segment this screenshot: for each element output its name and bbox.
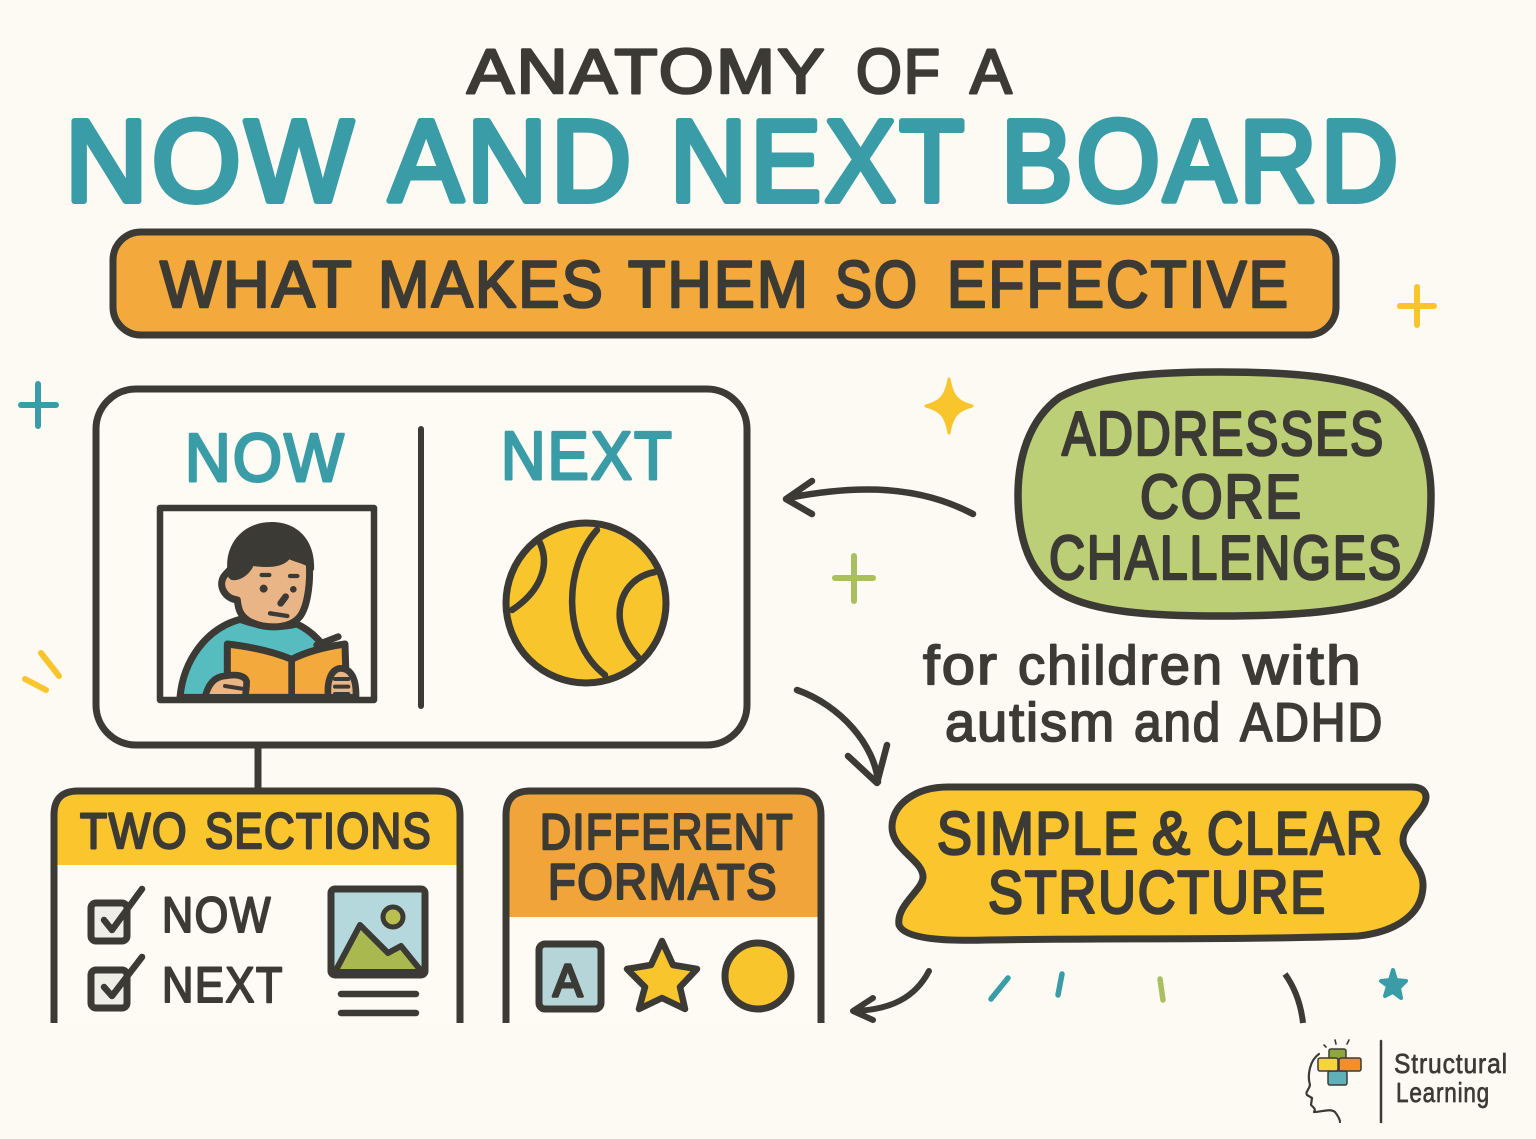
heading: different formats: FORMATS: [548, 854, 778, 910]
sparkle: yellow star: [926, 379, 972, 433]
icon: letter A: [539, 944, 601, 1009]
callout: simple and clear structure: SIMPLE: [937, 800, 1140, 867]
subtitle banner: THEM: [628, 247, 810, 321]
text: for children with autism and ADHD: ADHD: [1240, 691, 1384, 753]
picture frame: [160, 508, 374, 700]
sparkle: small dashes: [991, 978, 1008, 999]
text: for children with autism and ADHD: children: [1018, 634, 1224, 696]
icon: yellow ball: [506, 523, 666, 683]
heading: two sections: TWO: [80, 803, 188, 859]
partial curve: [1285, 974, 1303, 1023]
title: anatomy of a: ANATOMY: [467, 37, 827, 107]
sparkle: teal plus: [21, 384, 56, 426]
heading: different formats: [540, 804, 794, 910]
callout: addresses core challenges: [1018, 372, 1431, 616]
board: now and next: [96, 389, 747, 745]
decorative sparkles: [21, 287, 1434, 1000]
subtitle banner: MAKES: [378, 247, 605, 321]
text: for children with autism and ADHD: for: [923, 634, 999, 696]
title: now and next board: [65, 96, 1402, 226]
sparkle: yellow dashes: [25, 653, 59, 690]
icon: picture: [331, 889, 425, 975]
title: now and next board: NEXT: [670, 96, 968, 226]
arrow: to different formats: [853, 971, 929, 1020]
icon: letter A: A: [553, 955, 584, 1006]
logo wordmark: Structural: [1394, 1048, 1508, 1079]
title: anatomy of a: [467, 37, 1014, 107]
arrow: to simple structure: [797, 690, 887, 783]
logo wordmark: Learning: [1396, 1077, 1490, 1108]
checkbox: now: [91, 889, 142, 941]
text: for children with autism and ADHD: [923, 634, 1384, 753]
text lines: [341, 994, 416, 1013]
subtitle banner: WHAT: [160, 247, 354, 321]
subtitle banner: SO: [835, 247, 919, 321]
callout: simple and clear structure: &: [1152, 800, 1192, 867]
heading: now: NOW: [185, 420, 346, 496]
sparkle: green plus: [835, 556, 873, 601]
text: for children with autism and ADHD: and: [1134, 691, 1222, 753]
subtitle banner: [113, 232, 1336, 335]
title: anatomy of a: OF: [856, 37, 942, 107]
heading: two sections: SECTIONS: [205, 803, 432, 859]
checkbox: next: [91, 957, 142, 1008]
logo icon: head with blocks: [1306, 1040, 1361, 1122]
panel: two sections: [54, 791, 460, 1023]
icon: circle: [725, 943, 791, 1009]
icon: star: [627, 941, 697, 1009]
connector: [254, 745, 262, 788]
subtitle banner: EFFECTIVE: [947, 247, 1290, 321]
label: now: NOW: [162, 887, 272, 943]
callout: addresses core challenges: CHALLENGES: [1049, 524, 1403, 593]
title: now and next board: BOARD: [1001, 96, 1402, 226]
sparkle: yellow plus: [1400, 287, 1434, 325]
callout: simple and clear structure: STRUCTURE: [988, 859, 1327, 926]
logo: structural learning: [1306, 1040, 1508, 1122]
heading: next: NEXT: [501, 418, 674, 494]
icon: child reading a book: [180, 522, 356, 697]
heading: two sections: [80, 803, 432, 859]
callout: addresses core challenges: ADDRESSES: [1062, 400, 1385, 469]
heading: different formats: DIFFERENT: [540, 804, 794, 860]
callout: addresses core challenges: CORE: [1140, 463, 1303, 532]
label: next: NEXT: [162, 957, 284, 1013]
arrow: to board from challenges: [786, 481, 973, 514]
sparkle: teal star: [1381, 970, 1406, 998]
callout: simple and clear structure: [892, 787, 1426, 940]
text: for children with autism and ADHD: autism: [945, 691, 1116, 753]
panel: different formats: [506, 791, 821, 1023]
logo divider: [1380, 1041, 1382, 1122]
title: now and next board: NOW: [65, 96, 357, 226]
title: anatomy of a: A: [970, 37, 1014, 107]
title: now and next board: AND: [389, 96, 635, 226]
callout: simple and clear structure: CLEAR: [1207, 800, 1384, 867]
text: for children with autism and ADHD: with: [1242, 634, 1363, 696]
logo wordmark: [1394, 1048, 1508, 1108]
